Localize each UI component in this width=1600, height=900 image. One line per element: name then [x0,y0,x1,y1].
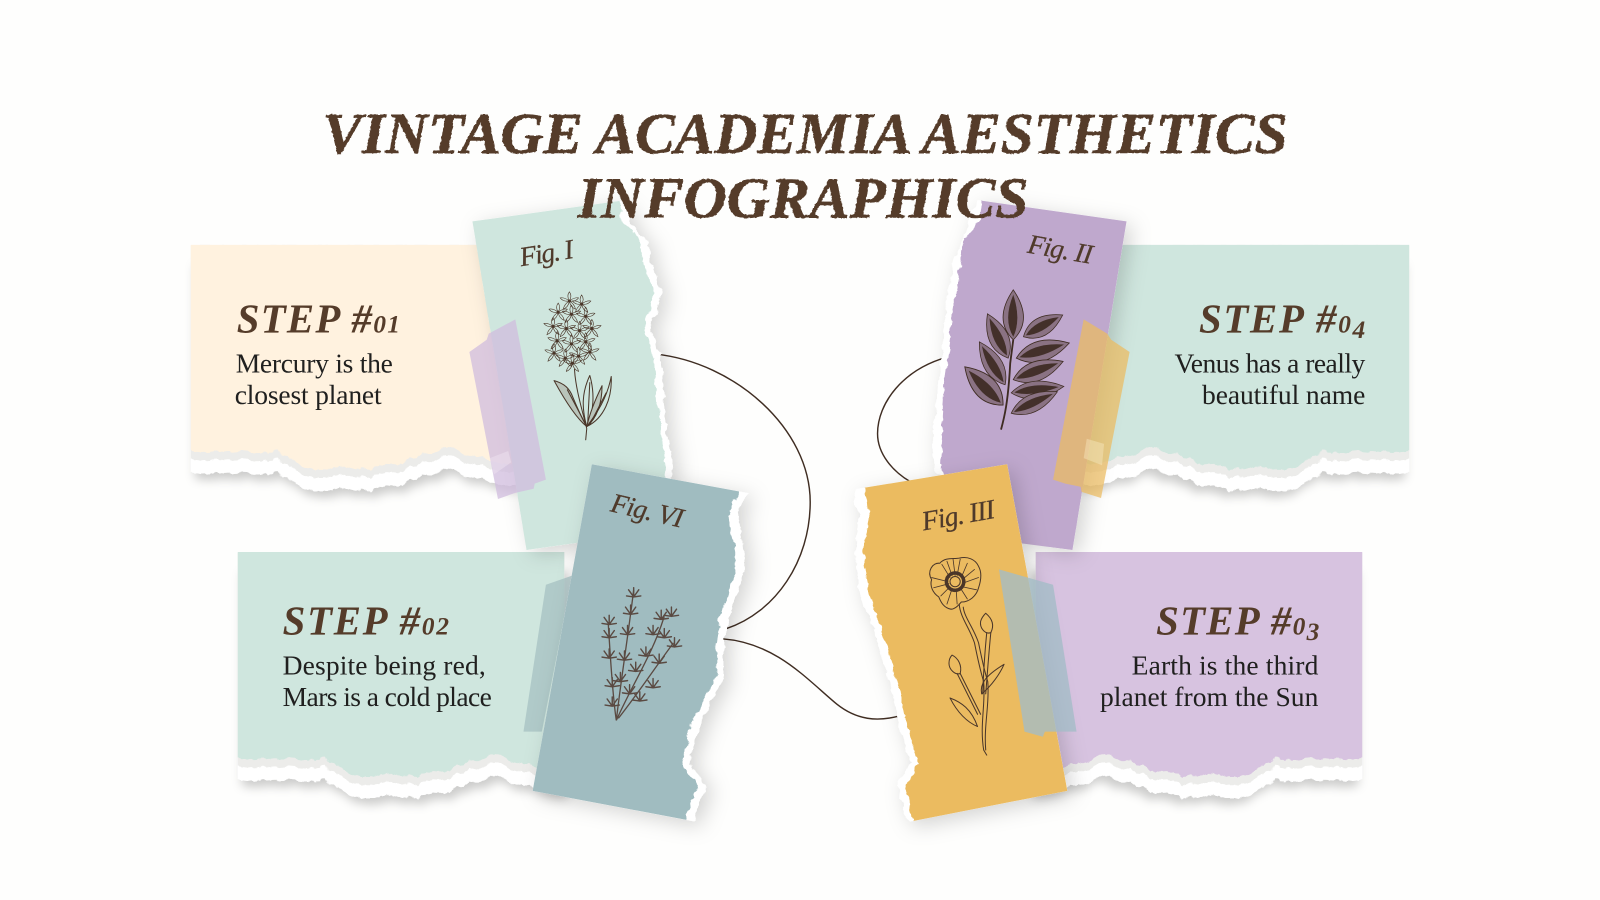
text: step 02: STEP #02 [283,599,449,644]
title [322,101,1288,230]
text: step 02 [283,599,492,712]
title: INFOGRAPHICS [577,165,1029,230]
panel: step 04 torn note [1062,237,1417,491]
text: step 03: 3 [1306,617,1320,646]
panel: figure I strip [464,194,673,556]
label: Fig. VI: Fig. VI [607,487,688,534]
panel: figure VI strip [526,459,750,827]
icon: allium flower [544,292,611,440]
title: VINTAGE ACADEMIA AESTHETICS [322,101,1288,166]
tape: figure III to step 03 [999,569,1077,737]
tape: figure I to step 01 [469,319,546,499]
text: step 03: STEP #0 [1156,599,1305,644]
text: step 01: closest planet [235,379,382,410]
text: step 03: Earth is the third [1132,649,1319,680]
text: step 03: planet from the Sun [1100,681,1319,712]
icon: poppy flower [930,558,1004,755]
panel: step 01 torn note [183,237,538,491]
text: step 01: Mercury is the [236,347,393,378]
label: Fig. I: Fig. I [516,233,577,272]
text: step 01 [235,297,400,410]
connector curves [655,354,947,719]
panel: figure III strip [855,459,1077,829]
label: Fig. II: Fig. II [1025,228,1097,270]
tape: figure II to step 04 [1053,319,1130,498]
text: step 04: 4 [1352,315,1365,344]
text: step 04 [1174,297,1366,410]
icon: thyme sprig [602,588,682,720]
tape: step 02 [523,576,572,732]
text: step 01: STEP #01 [237,297,400,342]
panel: step 02 torn note [230,544,585,798]
text: step 04: STEP #0 [1199,297,1351,342]
panel: figure II strip [933,194,1133,556]
panel: step 03 torn note [1015,544,1370,798]
icon: ash leaf branch [957,290,1072,430]
text: step 02: Mars is a cold place [283,681,492,712]
text: step 02: Despite being red, [283,649,486,680]
text: step 04: beautiful name [1202,379,1365,410]
text: step 04: Venus has a really [1174,347,1366,378]
text: step 03 [1100,599,1320,712]
label: Fig. III: Fig. III [918,493,999,537]
